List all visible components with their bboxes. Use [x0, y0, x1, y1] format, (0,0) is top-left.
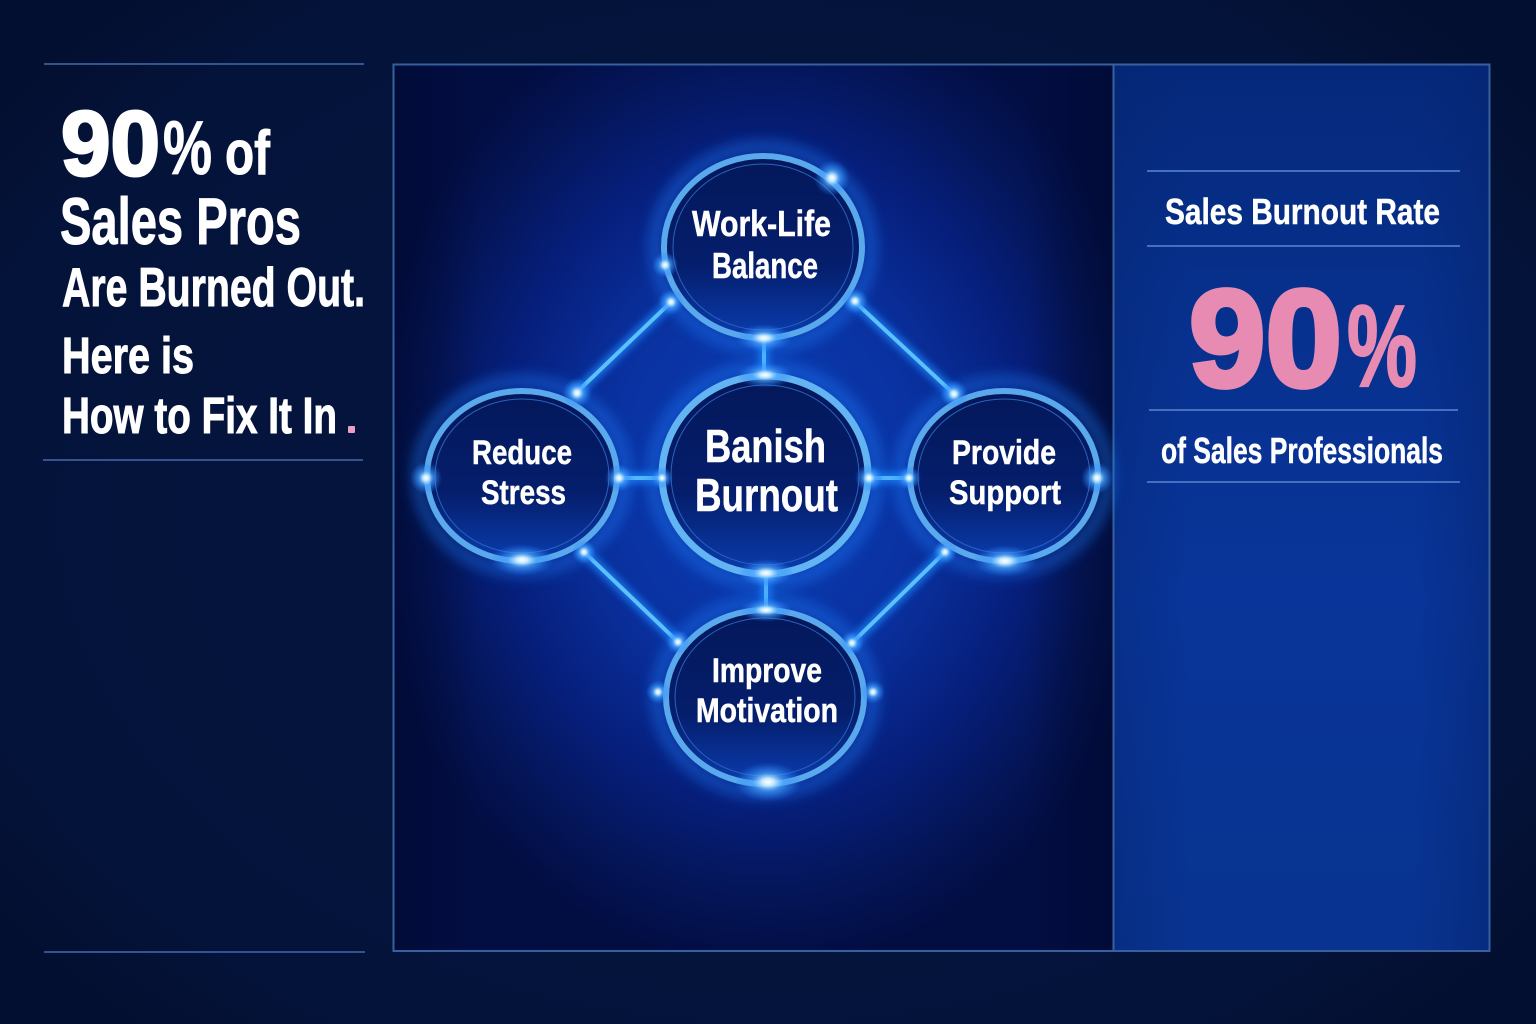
label: Motivation: [696, 692, 838, 730]
statistic heading: Sales Burnout Rate: [1165, 191, 1440, 232]
panel: headline: [43, 63, 365, 953]
headline line: 90% of: [61, 93, 270, 195]
headline line: Sales Pros: Sales Pros: [60, 184, 301, 258]
panel: statistic background: [1113, 64, 1490, 951]
label: Banish: [705, 420, 826, 472]
connector glow: [576, 301, 954, 643]
headline line: 90% of: of: [225, 119, 270, 188]
headline line: Are Burned Out.: Are Burned Out.: [62, 256, 365, 318]
panel frame: [394, 64, 1490, 951]
label: Provide: [952, 434, 1056, 472]
panel: diagram background: [393, 64, 1113, 951]
statistic rule 3: [1149, 409, 1458, 411]
node: Improve Motivation: [646, 598, 885, 802]
headline line: How to Fix It In: How to Fix It In: [62, 387, 337, 444]
node: Reduce Stress: [410, 378, 633, 576]
label: Balance: [712, 245, 818, 286]
headline line: Here is: Here is: [62, 327, 194, 384]
panel: statistic: [1147, 170, 1460, 483]
headline top rule: [44, 63, 364, 65]
label: Work-Life: [692, 203, 831, 244]
statistic rule 4: [1147, 481, 1460, 483]
node: Work-Life Balance: [652, 147, 871, 352]
label: Reduce: [472, 434, 572, 472]
big number: 90: [1189, 262, 1342, 416]
headline line: 90% of: 90: [61, 93, 160, 195]
headline line: 90% of: %: [163, 106, 212, 191]
label: [949, 434, 1061, 512]
statistic caption: of Sales Professionals: [1161, 430, 1443, 471]
label: Support: [949, 474, 1061, 512]
statistic rule 2: [1147, 245, 1460, 247]
bottom rule: [44, 951, 365, 953]
label: [695, 420, 838, 521]
label: Stress: [481, 474, 566, 512]
label: Burnout: [695, 469, 838, 521]
label: [472, 434, 572, 512]
connector core lines: [576, 301, 954, 643]
big number: %: [1347, 281, 1417, 411]
label: [692, 203, 831, 286]
label: Improve: [712, 652, 822, 690]
label: [696, 652, 838, 730]
node: Provide Support: [897, 380, 1113, 577]
big number: [1189, 262, 1417, 416]
node: Banish Burnout: [651, 362, 883, 587]
statistic rule 1: [1147, 170, 1460, 172]
connectors: [576, 301, 954, 643]
headline lower rule: [43, 459, 363, 461]
pink period: [348, 426, 355, 433]
